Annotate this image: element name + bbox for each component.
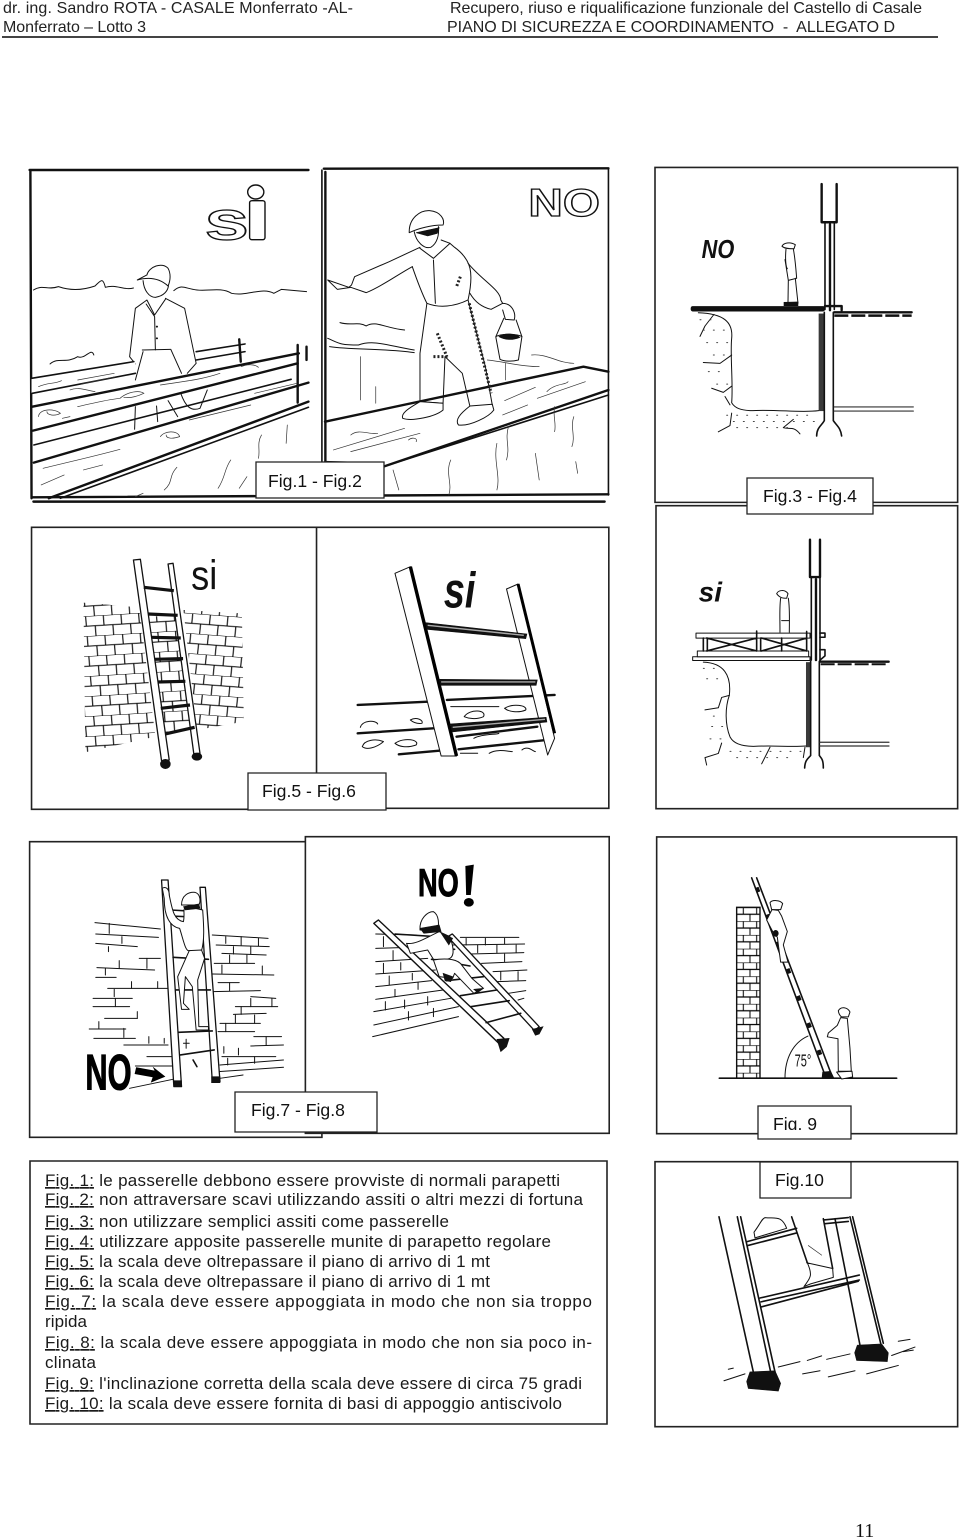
header: left author lines: dr. ing. Sandro ROTA - CASALE Monferrato -AL- [3,0,353,17]
panel: text legend: ripida [45,1312,88,1331]
panel: figure 4 [656,506,958,809]
panel: figure 6 [317,527,609,808]
label: Fig. 9: Fig. 9 [773,1114,817,1134]
icon: NO lettering with arrow: NO [85,1045,132,1100]
icon: si lettering: si [699,578,723,608]
panel: figure 3 [655,167,958,502]
drawing: ladder at 75 degrees: 75° [795,1052,811,1071]
label: Fig.10: Fig.10 [775,1170,824,1190]
panel: figure 5 [32,527,318,809]
label: Fig.7 - Fig.8 [235,1092,377,1132]
header: right project lines [447,0,922,36]
drawing: plank over a trench without parapet [691,184,913,436]
panel: text legend: Fig. 4: utilizzare apposite passerelle munite di parapetto regolare [45,1232,551,1251]
header: left author lines [3,0,353,36]
label: Fig.3 - Fig.4 [747,478,873,514]
header: left author lines: Monferrato – Lotto 3 [3,19,146,36]
panel: text legend: clinata [45,1353,97,1372]
label: Fig. 9 [758,1106,851,1139]
figure 1: worker on railed walkway [32,265,308,498]
header: right project lines: PIANO DI SICUREZZA E COORDINAMENTO - ALLEGATO D [447,19,895,36]
label: Fig.1 - Fig.2 [256,462,384,498]
icon: NO lettering: NO [702,235,734,263]
drawing: ladder over brick wall [83,559,244,769]
label: Fig.5 - Fig.6: Fig.5 - Fig.6 [262,781,356,801]
panel: figure 9 [657,837,957,1134]
icon: si lettering [205,185,265,251]
label: Fig.7 - Fig.8: Fig.7 - Fig.8 [251,1100,345,1120]
panel: text legend: Fig. 5: la scala deve oltrepassare il piano di arrivo di 1 mt [45,1252,490,1271]
panel: text legend: Fig. 10: la scala deve essere fornita di basi di appoggio antiscivolo [45,1394,562,1413]
icon: NO! lettering: NO [418,861,459,904]
label: Fig.1 - Fig.2: Fig.1 - Fig.2 [268,471,362,491]
panel: figures 1 and 2 [30,168,608,502]
panel: text legend: Fig. 9: l'inclinazione corretta della scala deve essere di circa 75 gradi [45,1374,582,1393]
drawing: ladder passing the landing [358,567,555,756]
panel: text legend: Fig. 8: la scala deve essere appoggiata in modo che non sia poco in- [45,1333,592,1352]
panel: text legend [30,1161,607,1424]
panel: figure 7 [30,842,322,1137]
panel: text legend: Fig. 2: non attraversare scavi utilizzando assiti o altri mezzi di fortuna [45,1190,584,1209]
drawing: ladder with anti-slip feet [719,1217,915,1391]
figure 2: worker crossing a plank [325,211,608,495]
label: Fig.10 [760,1162,851,1198]
icon: si lettering: s [205,189,249,251]
panel: text legend: Fig. 1: le passerelle debbono essere provviste di normali parapetti [45,1171,560,1190]
drawing: walkway with parapet over a trench [693,540,889,768]
header: right project lines: Recupero, riuso e riqualificazione funzionale del Castello di Casale [450,0,922,17]
panel: figure 8 [305,837,609,1133]
drawing: worker on too steep ladder [89,880,283,1088]
panel: text legend: Fig. 7: la scala deve essere appoggiata in modo che non sia troppo [45,1292,592,1311]
drawing: ladder at 75 degrees [719,878,897,1079]
panel: text legend: Fig. 6: la scala deve oltrepassare il piano di arrivo di 1 mt [45,1272,490,1291]
drawing: worker on too shallow ladder [373,912,543,1052]
icon: NO lettering: NO [528,181,600,224]
icon: si lettering: si [191,551,217,599]
label: Fig.5 - Fig.6 [248,773,386,810]
panel: text legend: Fig. 3: non utilizzare semplici assiti come passerelle [45,1212,449,1231]
panel: figure 10 [655,1162,958,1427]
label: Fig.3 - Fig.4: Fig.3 - Fig.4 [763,486,857,506]
icon: si lettering: si [444,563,476,618]
